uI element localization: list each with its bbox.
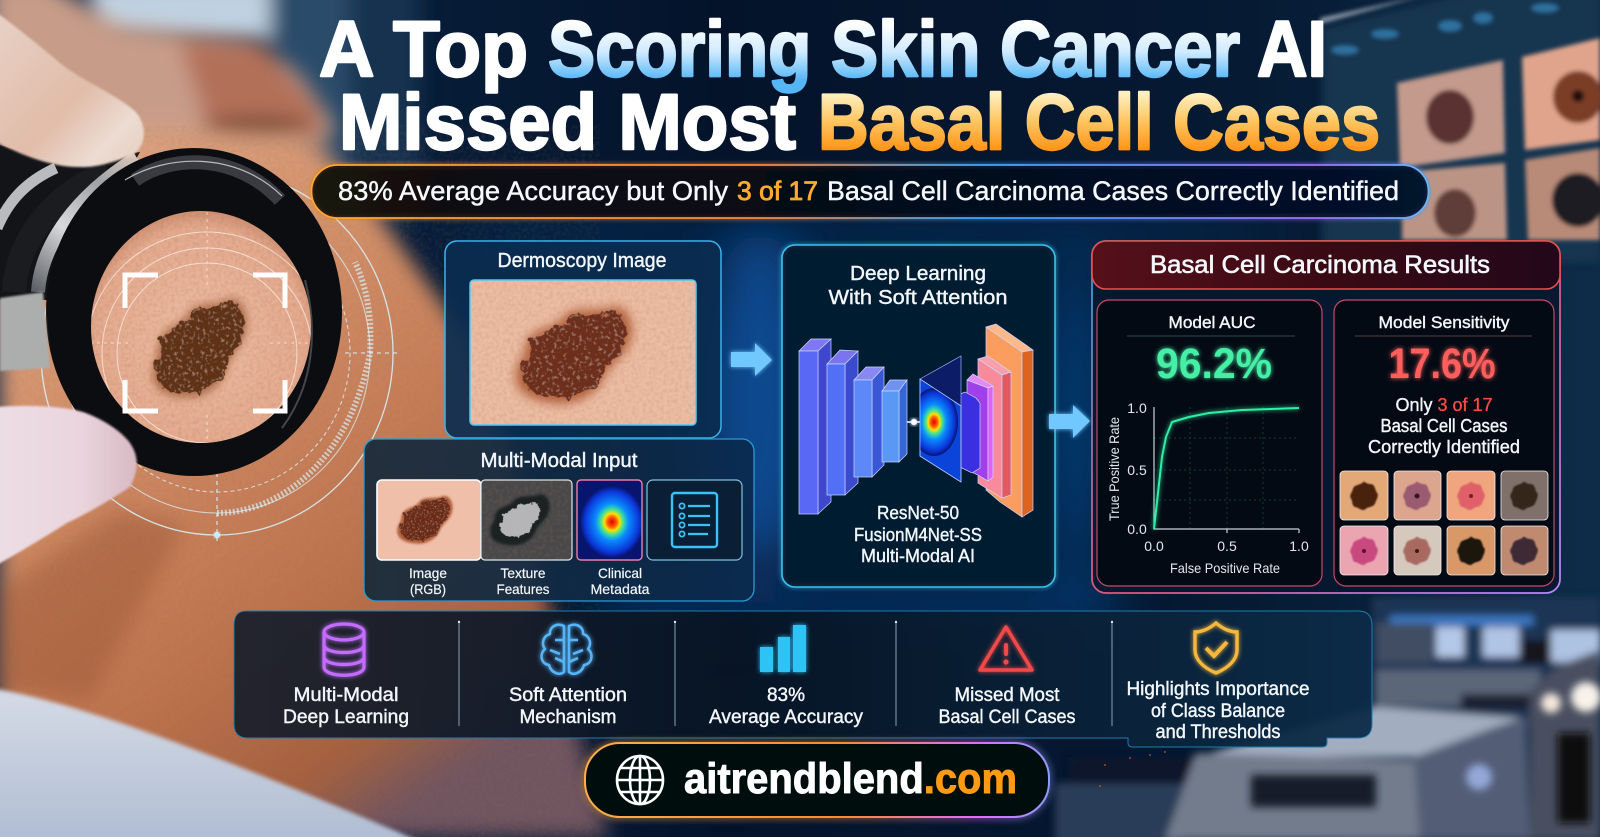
AUC label: Model AUC: [1168, 313, 1256, 332]
label: [283, 685, 409, 728]
magnifier: black rim: [46, 148, 342, 476]
title: Basal Cell Cases: [818, 77, 1380, 166]
magnifier: rim highlight: [125, 161, 312, 428]
magnifier: silver band: [38, 158, 137, 292]
title: [319, 4, 1380, 166]
magnifier: knurled and silver rings: [0, 168, 108, 292]
sensitivity label: Model Sensitivity: [1378, 313, 1510, 332]
background: cloth sleeve: [0, 688, 440, 837]
arrow: model to results: [1049, 405, 1090, 438]
background: lab equipment: [1055, 597, 1600, 837]
gloved thumb: [0, 11, 144, 167]
HUD node: [214, 532, 220, 538]
subtitle pill: 83% Average Accuracy but Only: [338, 176, 728, 206]
icon: shield: [1195, 623, 1237, 673]
model heading: Deep Learning: [850, 263, 986, 285]
model captions: ResNet-50: [877, 503, 959, 523]
subtitle pill: [312, 165, 1428, 218]
magnifier: side hardware base: [0, 145, 140, 300]
sensitivity value: 17.6%: [1388, 340, 1496, 388]
diagram: encoder blocks: [799, 339, 907, 514]
dermoscopy photo: [470, 280, 696, 425]
results header: [1092, 241, 1560, 289]
icon: database: [324, 624, 364, 675]
label: of Class Balance: [1151, 701, 1285, 722]
diagram: decoder blocks: [958, 324, 1033, 517]
AUC value: 96.2%: [1156, 340, 1272, 388]
background: shadow on arm: [0, 510, 185, 700]
input: metadata document: [647, 480, 742, 560]
background: central blue glow: [440, 221, 1280, 620]
takeaway: class balance: [1126, 623, 1310, 743]
arrow: image to model: [731, 343, 772, 376]
input labels: Texture: [500, 565, 546, 581]
ROC chart: 1.0: [1127, 400, 1147, 416]
background: top wall: [90, 0, 420, 220]
input: texture features: [481, 480, 572, 560]
ROC chart: [1106, 336, 1309, 576]
ROC chart: True Positive Rate: [1106, 417, 1122, 521]
label: Multi-Modal: [294, 685, 398, 706]
icon: globe: [617, 756, 663, 804]
subtitle pill: Basal Cell Carcinoma Cases Correctly Identified: [827, 176, 1399, 206]
model captions: [854, 503, 982, 566]
card: model AUC: [1097, 300, 1322, 586]
input labels: Image: [409, 565, 447, 581]
card: model sensitivity: [1334, 300, 1554, 586]
multi-modal heading: Multi-Modal Input: [480, 450, 638, 472]
silver tape: [0, 292, 50, 371]
ROC chart: 0.5: [1127, 462, 1147, 478]
panel: basal cell carcinoma results: [1092, 241, 1560, 593]
ROC chart: False Positive Rate: [1170, 560, 1280, 576]
magnifier lens: [0, 145, 342, 476]
background: skin pores: [0, 125, 600, 837]
label: [1126, 679, 1310, 743]
icon: bar chart: [760, 625, 806, 672]
results header: Basal Cell Carcinoma Results: [1150, 251, 1490, 279]
takeaway: multi-modal: [283, 624, 409, 728]
input labels: [409, 565, 650, 597]
input labels: (RGB): [410, 581, 446, 597]
icon: warning triangle: [980, 627, 1032, 670]
gloved finger: [0, 406, 137, 566]
magnifier: glass: [91, 211, 311, 443]
label: Mechanism: [520, 707, 616, 728]
ROC chart: 0.0: [1144, 538, 1164, 554]
sensitivity caption: [1355, 336, 1532, 457]
diagram: neural network: [799, 324, 1033, 517]
panel: deep learning model: [782, 245, 1055, 587]
magnifier: focus brackets: [125, 275, 285, 411]
label: Missed Most: [954, 685, 1060, 706]
input labels: Metadata: [590, 581, 650, 597]
panel: dermoscopy image: [445, 241, 721, 438]
label: [938, 685, 1076, 728]
label: Average Accuracy: [709, 707, 863, 728]
input labels: Clinical: [598, 565, 642, 581]
model captions: FusionM4Net-SS: [854, 525, 982, 545]
input labels: Features: [496, 581, 550, 597]
title: Scoring Skin Cancer: [548, 4, 1240, 93]
magnifier: view contents: [91, 212, 311, 443]
takeaway: soft attention: [509, 625, 627, 728]
ROC chart: 1.0: [1289, 538, 1309, 554]
icon: brain: [542, 625, 591, 674]
subtitle pill: 3 of 17: [737, 176, 818, 206]
diagram: attention map: [920, 355, 962, 483]
label: Basal Cell Cases: [938, 707, 1076, 728]
panel: multi-modal input: [364, 439, 754, 601]
label: 83%: [767, 685, 805, 706]
diagram: connector spark: [907, 419, 927, 425]
label: Deep Learning: [283, 707, 409, 728]
model captions: Multi-Modal AI: [861, 546, 975, 566]
label: Soft Attention: [509, 685, 627, 706]
sensitivity caption: Basal Cell Cases: [1380, 416, 1508, 436]
title: AI: [1257, 4, 1327, 93]
website pill: [585, 743, 1049, 817]
background: monitor with dermoscopy images: [1320, 0, 1600, 262]
model heading: [828, 263, 1008, 309]
takeaway: accuracy: [709, 625, 863, 728]
sensitivity caption: Correctly Identified: [1368, 437, 1520, 457]
background: skin of the arm: [0, 125, 610, 837]
label: and Thresholds: [1156, 722, 1280, 743]
takeaway: missed cases: [938, 627, 1076, 728]
title: Missed Most: [339, 77, 796, 166]
ROC chart: 0.0: [1127, 521, 1147, 537]
label: [509, 685, 627, 728]
input: RGB image: [377, 480, 481, 560]
website address: aitrendblend.com: [684, 755, 1017, 803]
HUD scan rings on the skin: [41, 171, 398, 545]
background: blurred hand: [0, 0, 335, 150]
ROC chart: 0.5: [1217, 538, 1237, 554]
label: Highlights Importance: [1126, 679, 1310, 700]
label: [709, 685, 863, 728]
bar dividers: [458, 621, 1113, 726]
panel: key takeaways bar: [234, 611, 1372, 747]
sensitivity caption: Only 3 of 17: [1395, 395, 1493, 415]
model heading: With Soft Attention: [828, 287, 1008, 309]
lesion thumbnails: [1340, 471, 1548, 575]
dermoscopy heading: Dermoscopy Image: [498, 250, 666, 272]
title: A Top: [319, 4, 528, 93]
input: clinical heatmap: [577, 480, 644, 560]
